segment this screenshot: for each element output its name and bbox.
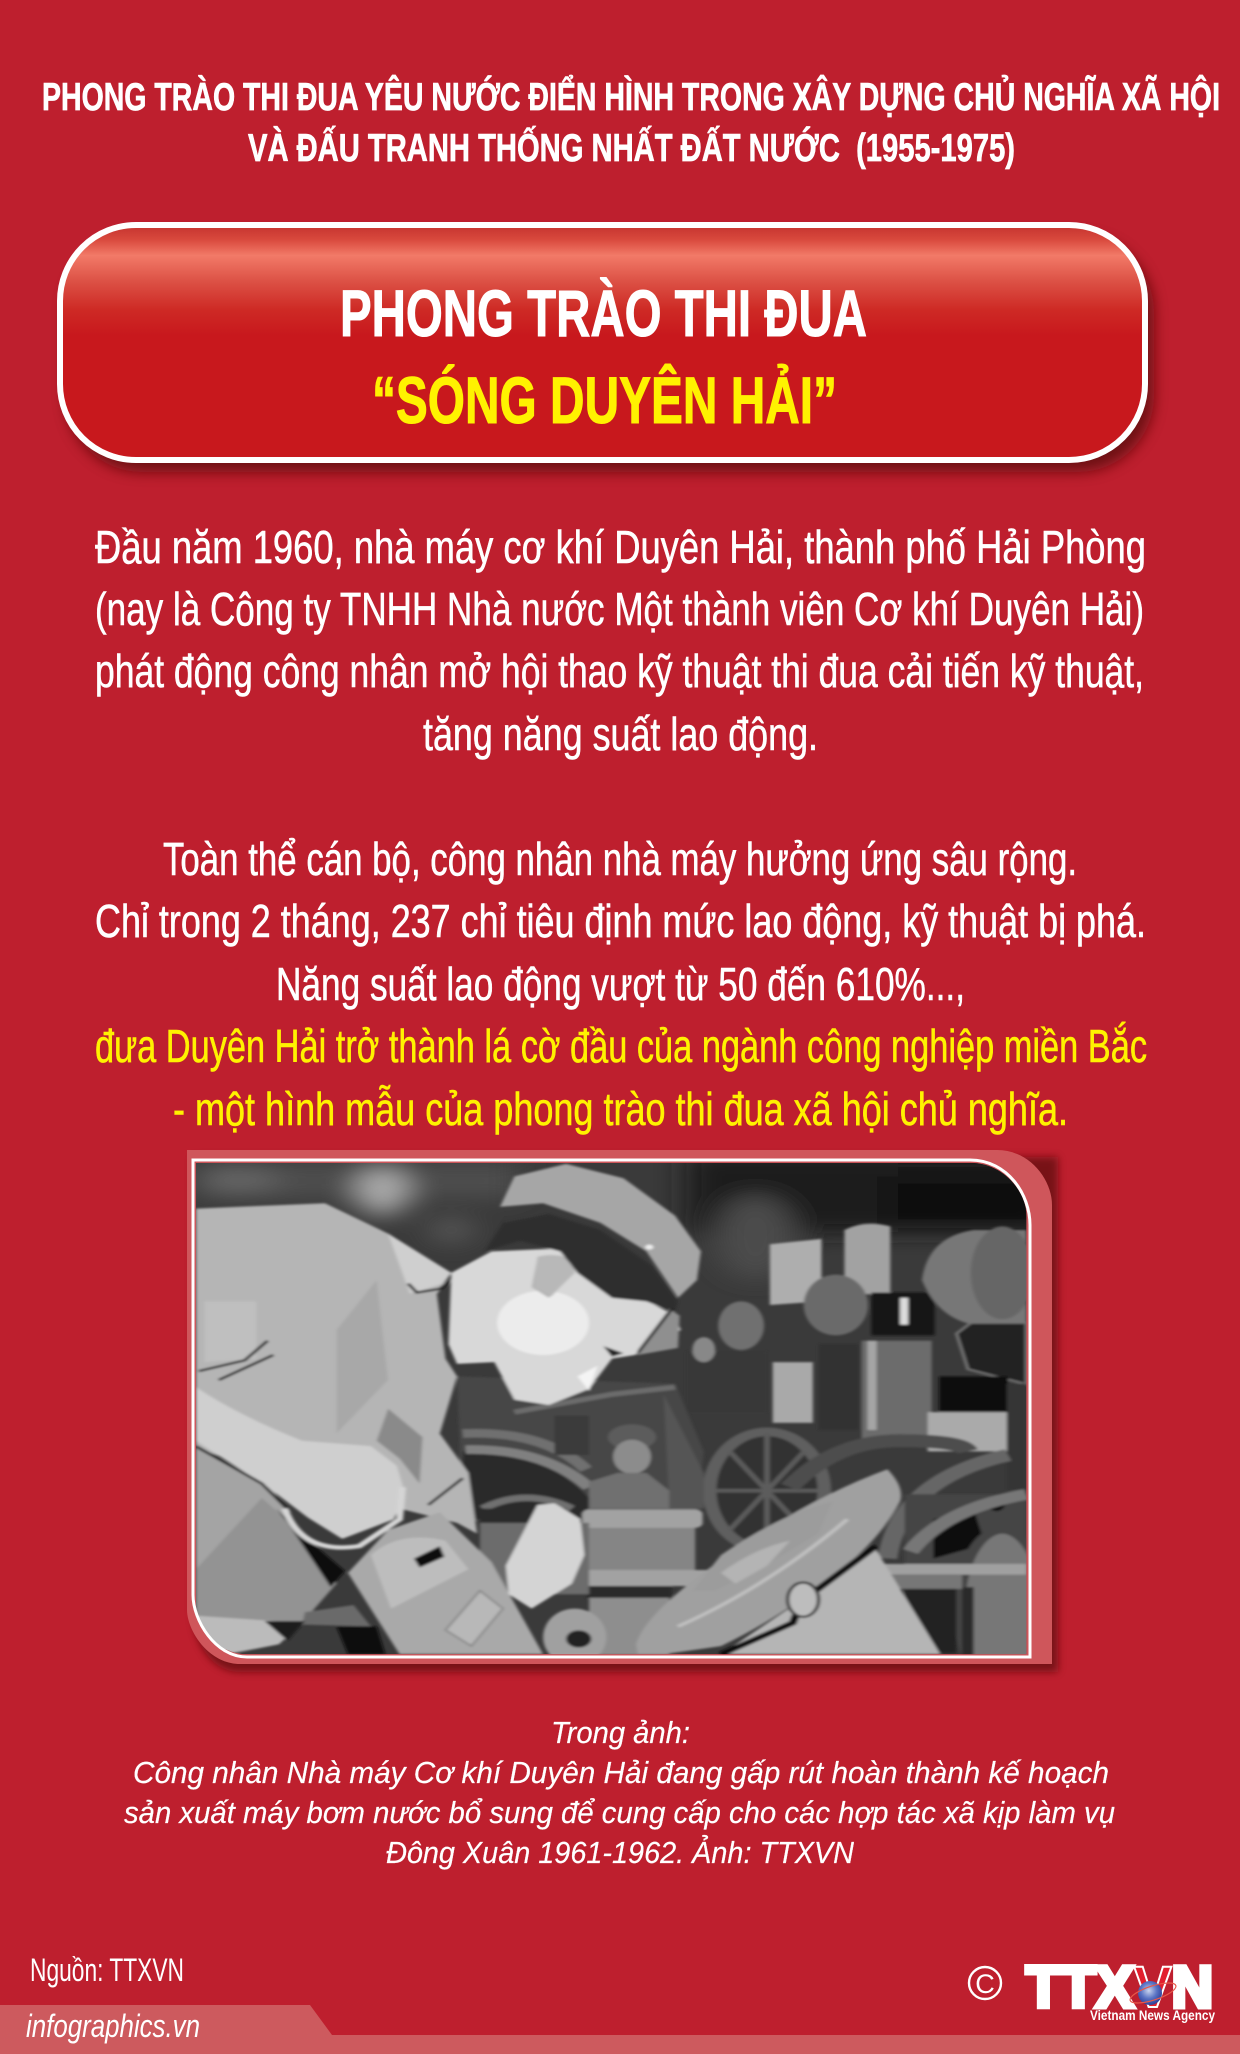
- dark shadows: [276, 1509, 345, 1587]
- worker shirt and trousers: [196, 1203, 477, 1534]
- photo frame with worker photograph: [187, 1150, 1058, 1687]
- caption: Đông Xuân 1961-1962. Ảnh: TTXVN: [386, 1834, 855, 1870]
- bucket: [586, 1523, 695, 1573]
- right side machinery: [770, 1239, 821, 1305]
- caption: [124, 1715, 1115, 1870]
- source label: Nguồn: TTXVN: [30, 1952, 184, 1988]
- text block: intro paragraph: tăng năng suất lao động.: [423, 708, 818, 760]
- neck and face: [448, 1248, 681, 1405]
- text block: yellow highlight: [95, 1020, 1147, 1135]
- cap: [500, 1164, 701, 1298]
- footer strip with website tab: [0, 2005, 1240, 2054]
- grinder tool: [348, 1512, 543, 1654]
- icon: copyright: [969, 1967, 1001, 1999]
- footer strip with website tab: infographics.vn: [26, 2008, 200, 2044]
- banner: pill heading: “SÓNG DUYÊN HẢI”: [372, 363, 837, 437]
- title: [42, 74, 1220, 170]
- fist on right: [506, 1503, 584, 1609]
- arm and hand: [196, 1387, 405, 1539]
- hair: [485, 1214, 678, 1312]
- background workshop: [457, 1376, 704, 1523]
- caption: Trong ảnh:: [551, 1715, 690, 1750]
- caption: Công nhân Nhà máy Cơ khí Duyên Hải đang gấp rút hoàn thành kế hoạch: [133, 1755, 1109, 1790]
- small person: [608, 1424, 656, 1446]
- banner: pill heading: [60, 225, 1154, 472]
- icon: copyright: C: [975, 1969, 995, 1999]
- text block: results paragraph: [95, 833, 1146, 1010]
- logo: TTXVN Vietnam News Agency: TTXVN: [1026, 1955, 1213, 2020]
- cone and flange: [721, 1550, 940, 1654]
- caption: sản xuất máy bơm nước bổ sung để cung cấp cho các hợp tác xã kịp làm vụ: [124, 1795, 1115, 1830]
- photo white border: [193, 1160, 1030, 1657]
- photo: worker operating pump machinery: [196, 1162, 1026, 1654]
- banner: pill heading: PHONG TRÀO THI ĐUA: [340, 276, 867, 350]
- text block: results paragraph: Năng suất lao động vượt từ 50 đến 610%...,: [276, 958, 965, 1010]
- logo: TTXVN Vietnam News Agency: Vietnam News Agency: [1090, 2008, 1215, 2023]
- wheels: [710, 1432, 824, 1550]
- text block: intro paragraph: [95, 521, 1146, 760]
